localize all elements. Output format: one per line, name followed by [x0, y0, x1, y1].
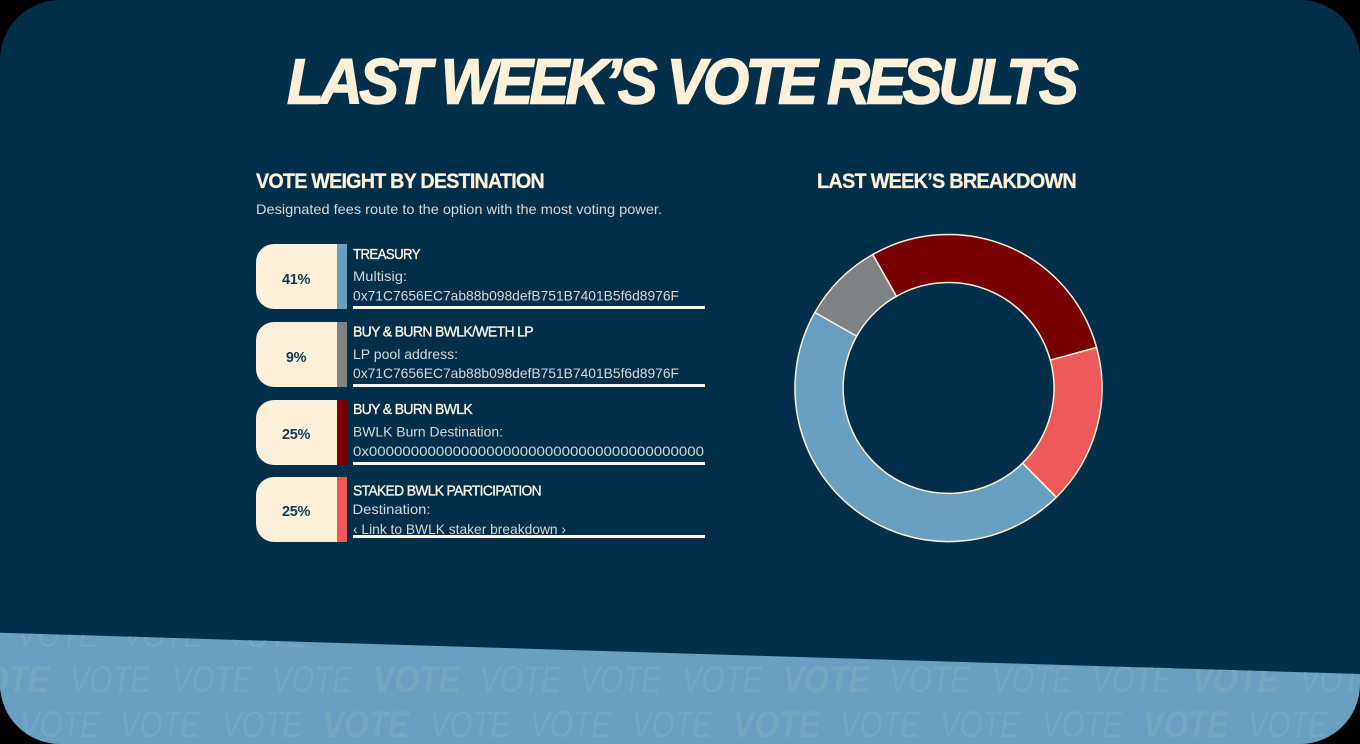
option name: BUY & BURN BWLK — [353, 401, 473, 418]
option name: TREASURY — [353, 246, 421, 263]
row: buy and burn BWLK — [256, 400, 705, 465]
address: 0x0000000000000000000000000000000000000000 — [353, 443, 704, 459]
footer band with VOTE pattern: VOTE — [272, 659, 353, 700]
footer band with VOTE pattern: VOTE — [733, 704, 821, 744]
row: buy and burn LP — [256, 322, 705, 387]
address: 0x71C7656EC7ab88b098defB751B7401B5f6d8976F — [353, 365, 679, 381]
footer band with VOTE pattern: VOTE — [1248, 704, 1329, 744]
title: LAST WEEK’S VOTE RESULTS — [287, 46, 1079, 118]
colour swatch: blue — [337, 244, 347, 309]
donut chart — [795, 234, 1102, 542]
segment: gray — [815, 254, 896, 336]
destination label: Multisig: — [353, 268, 407, 284]
option name: STAKED BWLK PARTICIPATION — [353, 482, 541, 500]
underline — [353, 462, 705, 465]
segment: red — [1023, 348, 1102, 497]
subheading: Designated fees route to the option with the most voting power. — [256, 201, 662, 217]
segment: blue — [795, 312, 1056, 542]
segment: dark red — [873, 234, 1097, 360]
colour swatch: dark red — [337, 400, 347, 465]
footer band with VOTE pattern: VOTE — [480, 659, 562, 700]
destination label: LP pool address: — [353, 346, 458, 362]
footer band with VOTE pattern: VOTE — [373, 659, 461, 700]
underline — [353, 306, 705, 309]
underline — [353, 384, 705, 387]
footer band with VOTE pattern: VOTE — [430, 704, 511, 744]
footer band with VOTE pattern: VOTE — [783, 659, 871, 700]
footer band with VOTE pattern — [0, 632, 1360, 744]
footer band with VOTE pattern: VOTE — [120, 704, 201, 744]
footer band with VOTE pattern: VOTE — [1042, 704, 1123, 744]
destination label: Destination: — [352, 501, 430, 517]
colour swatch: red — [337, 477, 347, 542]
footer band with VOTE pattern: VOTE — [580, 659, 662, 700]
value: 25%: 25% — [282, 427, 310, 443]
row: staked BWLK participation — [256, 477, 705, 542]
value: 41%: 41% — [282, 272, 310, 288]
footer band with VOTE pattern: VOTE — [222, 704, 303, 744]
value: 9%: 9% — [286, 350, 307, 366]
footer band with VOTE pattern: VOTE — [940, 704, 1021, 744]
option name: BUY & BURN BWLK/WETH LP — [353, 324, 534, 340]
heading: vote weight by destination: VOTE WEIGHT BY DESTINATION — [256, 170, 544, 193]
percentage card: 25% — [256, 477, 337, 542]
footer band with VOTE pattern: VOTE — [632, 704, 713, 744]
footer band with VOTE pattern: VOTE — [323, 704, 410, 744]
underline — [353, 535, 705, 538]
footer band with VOTE pattern: VOTE — [20, 704, 101, 744]
footer band with VOTE pattern: VOTE — [530, 704, 612, 744]
footer band with VOTE pattern: VOTE — [840, 704, 921, 744]
footer band with VOTE pattern: VOTE — [992, 659, 1073, 700]
footer band with VOTE pattern: VOTE — [1143, 704, 1229, 744]
footer band with VOTE pattern: VOTE — [889, 659, 971, 700]
link text: ‹ Link to BWLK staker breakdown › — [353, 521, 566, 537]
row: treasury — [256, 244, 705, 309]
percentage card: 9% — [256, 322, 337, 387]
percentage card: 25% — [256, 400, 337, 465]
footer band with VOTE pattern: VOTE — [1092, 659, 1173, 700]
footer band with VOTE pattern: VOTE — [227, 614, 308, 655]
footer band with VOTE pattern: VOTE — [682, 659, 763, 700]
footer band with VOTE pattern: VOTE — [123, 614, 204, 655]
footer band with VOTE pattern: VOTE — [17, 614, 100, 655]
colour swatch: gray — [337, 322, 347, 387]
value: 25%: 25% — [282, 504, 310, 520]
footer band with VOTE pattern: VOTE — [1192, 659, 1280, 700]
address: 0x71C7656EC7ab88b098defB751B7401B5f6d8976F — [353, 288, 679, 304]
footer band with VOTE pattern: VOTE — [172, 659, 253, 700]
footer band with VOTE pattern: VOTE — [70, 659, 151, 700]
destination label: BWLK Burn Destination: — [353, 424, 503, 440]
percentage card: 41% — [256, 244, 337, 309]
heading: last week's breakdown: LAST WEEK’S BREAKDOWN — [817, 170, 1076, 193]
